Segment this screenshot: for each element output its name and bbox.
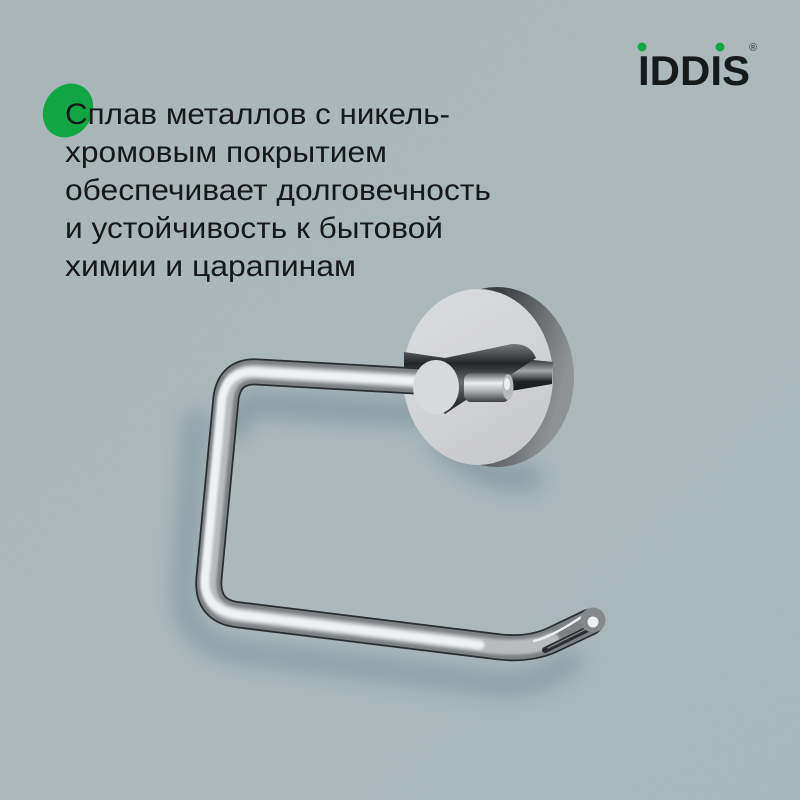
- back post: [505, 357, 553, 392]
- mounting plate rim: [420, 287, 574, 467]
- chrome tube: [205, 372, 590, 650]
- registered mark: ®: [749, 42, 757, 54]
- main text: и устойчивость к бытовой: [65, 212, 443, 245]
- logo: IDDIS: IDDIS: [638, 47, 750, 94]
- main arm: [404, 344, 536, 414]
- main text: обеспечивает долговечность: [65, 174, 491, 207]
- main text: Сплав металлов с никель-: [65, 98, 450, 131]
- green accent blob: [33, 74, 103, 147]
- screw pin: [464, 373, 514, 402]
- mounting plate face: [403, 289, 553, 465]
- logo dot left: [638, 42, 646, 52]
- main text: химии и царапинам: [65, 250, 356, 283]
- holder shadow on wall: [184, 404, 572, 684]
- tube tip: [580, 608, 606, 632]
- logo dot right: [716, 42, 724, 52]
- main text: хромовым покрытием: [65, 136, 387, 169]
- toilet paper holder: [205, 287, 606, 650]
- main text: [65, 98, 491, 283]
- arm end cap: [413, 360, 459, 414]
